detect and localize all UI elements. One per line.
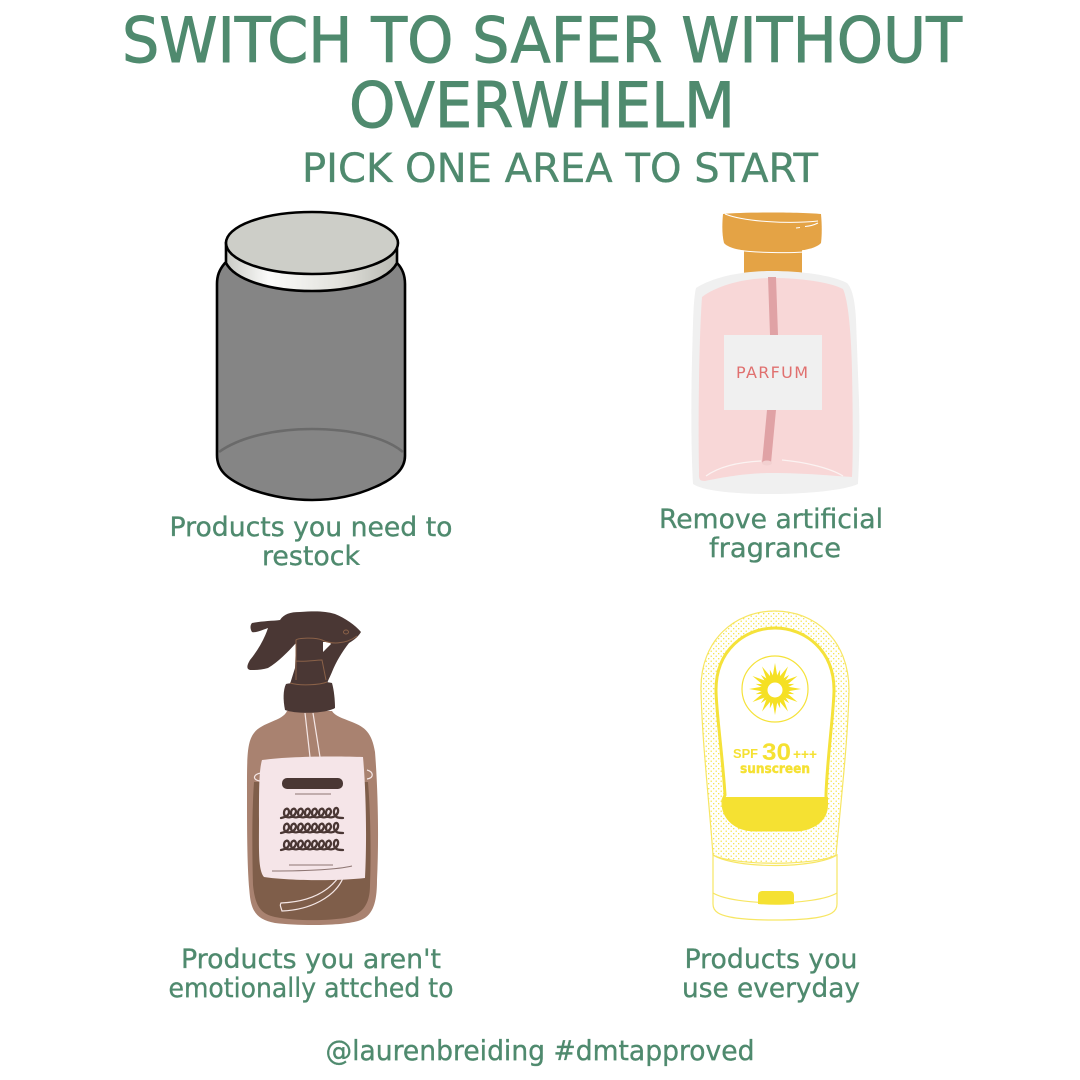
caption: fragrance: Remove artificial [659, 504, 883, 535]
SPF text: 30 [762, 739, 791, 766]
icon: grey jar [217, 212, 405, 500]
label scribble rows [281, 808, 343, 850]
spray bottle body [247, 711, 378, 925]
SPF text: SPF [733, 746, 758, 761]
title: SWITCH TO SAFER WITHOUT [122, 4, 963, 77]
icon: spray bottle [247, 611, 378, 925]
cap tab [758, 891, 794, 905]
glass highlights [706, 460, 843, 476]
caption: restock: restock [262, 541, 360, 572]
caption: everyday [682, 944, 860, 1004]
caption: fragrance [659, 504, 883, 564]
label title bar [282, 778, 343, 789]
tube body [701, 611, 849, 863]
perfume dip tube [762, 277, 778, 463]
tube cap [713, 855, 837, 920]
spray trigger head [247, 611, 361, 684]
caption: emotionally attached: emotionally attched to [168, 973, 454, 1004]
icon: sunscreen tube [701, 611, 849, 920]
spray collar [284, 682, 335, 713]
spray label [259, 756, 366, 880]
tube front panel [716, 628, 834, 830]
perfume liquid [699, 278, 853, 481]
caption: restock: Products you need to [170, 512, 452, 543]
perfume cap [722, 212, 822, 252]
sun rays [749, 663, 801, 715]
caption: restock [170, 512, 452, 572]
label text: PARFUM [736, 363, 808, 382]
sun emblem ring [742, 656, 808, 722]
caption: fragrance: fragrance [709, 533, 841, 564]
perfume label [724, 335, 822, 410]
caption: emotionally attached: Products you aren't [181, 944, 441, 975]
cap highlights [725, 214, 818, 253]
title: OVERWHELM [349, 69, 735, 142]
trigger opening and stem outlines [323, 642, 331, 652]
jar lid top [226, 212, 398, 274]
label loops [254, 770, 372, 781]
caption: everyday: Products you [684, 944, 858, 975]
caption: emotionally attached [168, 944, 454, 1004]
tube yellow fill [723, 797, 828, 831]
jar base rim [219, 429, 403, 452]
cap seam [713, 893, 837, 903]
footer handle and hashtag: @laurenbreiding #dmtapproved [326, 1034, 754, 1067]
icon: perfume bottle [691, 212, 859, 494]
label text lines [272, 794, 352, 871]
spray inner tube [280, 713, 343, 911]
perfume neck [744, 250, 802, 274]
jar lid band [226, 243, 397, 291]
jar body [217, 263, 405, 500]
SPF text: +++ [793, 746, 817, 762]
sunscreen text: sunscreen [740, 762, 810, 777]
caption: everyday: use everyday [682, 973, 860, 1004]
title [122, 4, 963, 142]
spray liquid [252, 782, 371, 920]
perfume glass [691, 271, 859, 494]
SPF text [733, 739, 817, 766]
subtitle: PICK ONE AREA TO START [302, 146, 819, 192]
